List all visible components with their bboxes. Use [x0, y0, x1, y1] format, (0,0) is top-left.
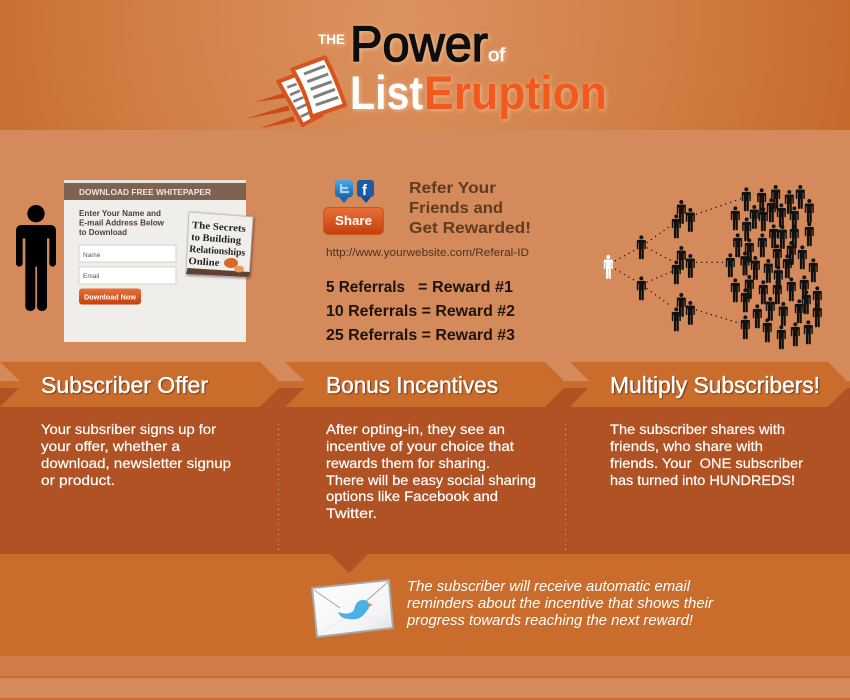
text: subscriber offer description: your offer, whether a [41, 438, 180, 454]
logo: of: of [488, 45, 506, 65]
text: bonus incentives description: options like Facebook and [326, 488, 498, 504]
crowd of subscribers [726, 185, 822, 349]
icon: facebook pin: f [362, 182, 368, 199]
chevron heading band [0, 362, 850, 407]
reminder section background [0, 554, 850, 656]
text: bonus incentives description: Twitter. [326, 505, 377, 521]
share button [324, 208, 384, 234]
text: multiply subscribers description: has turned into HUNDREDS! [610, 472, 795, 488]
footer stripes [0, 656, 850, 700]
white original subscriber [604, 255, 613, 279]
text: subscriber offer description: Your subsriber signs up for [41, 421, 216, 437]
ebook cover: to Building [191, 232, 241, 246]
first level friends [637, 235, 646, 300]
text: multiply subscribers description: friends. Your ONE subscriber [610, 455, 803, 471]
download button: Download Now [84, 294, 137, 302]
logo: Eruption: Eruption [424, 66, 607, 119]
email input [79, 267, 176, 284]
referral reward list: 5 Referrals [326, 279, 405, 296]
arrow: pointer into reminder section [330, 554, 368, 573]
share button: Share [335, 213, 372, 228]
download button [79, 288, 141, 304]
ebook cover [186, 212, 253, 277]
text: bonus incentives description: rewards them for sharing. [326, 455, 490, 471]
text: email reminder callout: The subscriber will receive automatic email [407, 579, 691, 595]
referral reward list: 10 Referrals = Reward #2 [326, 303, 515, 320]
heading: bonus incentives: Bonus Incentives [326, 372, 498, 398]
logo icon: flying pages [245, 57, 345, 128]
heading: refer your friends: Friends and [409, 200, 503, 217]
logo: List: List [350, 66, 423, 119]
text: bonus incentives description: There will be easy social sharing [326, 472, 536, 488]
referral reward list [326, 279, 515, 344]
text: multiply subscribers description [610, 421, 803, 488]
referral url: http://www.yourwebsite.com/Referal-ID [326, 247, 529, 259]
text: bonus incentives description [326, 421, 536, 521]
text: multiply subscribers description: friends, who share with [610, 438, 763, 454]
name input [79, 245, 176, 262]
logo: Power: Power [350, 16, 488, 72]
text: multiply subscribers description: The subscriber shares with [610, 421, 785, 437]
email input: Email [83, 273, 100, 280]
form instructions: E-mail Address Below [79, 218, 165, 228]
heading: refer your friends: Refer Your [409, 180, 496, 197]
icon: large subscriber figure [16, 205, 56, 311]
referral reward list: = Reward #1 [418, 279, 513, 296]
text: subscriber offer description: or product. [41, 472, 115, 488]
top section background [0, 130, 850, 362]
name input: Name [83, 252, 101, 259]
text: email reminder callout [406, 579, 714, 629]
text: subscriber offer description: download, newsletter signup [41, 455, 231, 471]
form instructions: Enter Your Name and [79, 209, 161, 218]
panel: download form screenshot [64, 180, 253, 342]
icon: twitter pin [335, 180, 353, 203]
ebook cover: Online [188, 256, 220, 269]
text: subscriber offer description [41, 421, 231, 488]
logo: THE: THE [318, 31, 345, 47]
ebook cover: The Secrets [192, 220, 246, 235]
icon: facebook pin [357, 180, 374, 203]
title logo [245, 16, 607, 128]
dotted connection lines [615, 198, 742, 323]
form instructions [79, 209, 165, 237]
referral reward list: 25 Referrals = Reward #3 [326, 327, 515, 344]
heading: subscriber offer: Subscriber Offer [41, 372, 208, 398]
ebook cover: Relationships [189, 244, 246, 259]
form header text: DOWNLOAD FREE WHITEPAPER [79, 187, 211, 197]
lower description section background [0, 407, 850, 554]
second level friends [672, 200, 695, 331]
diagram: referral network [604, 185, 822, 349]
heading: refer your friends: Get Rewarded! [409, 220, 531, 237]
header background [0, 0, 850, 130]
icon: envelope with bird [312, 580, 393, 637]
text: email reminder callout: progress towards reaching the next reward! [406, 613, 693, 629]
dotted column dividers [278, 424, 566, 552]
heading: refer your friends [409, 180, 531, 237]
heading: multiply subscribers: Multiply Subscribers! [610, 372, 820, 398]
text: bonus incentives description: incentive of your choice that [326, 438, 514, 454]
text: email reminder callout: reminders about the incentive that shows their [407, 596, 714, 612]
text: bonus incentives description: After opting-in, they see an [326, 421, 505, 437]
form instructions: to Download [79, 228, 127, 237]
